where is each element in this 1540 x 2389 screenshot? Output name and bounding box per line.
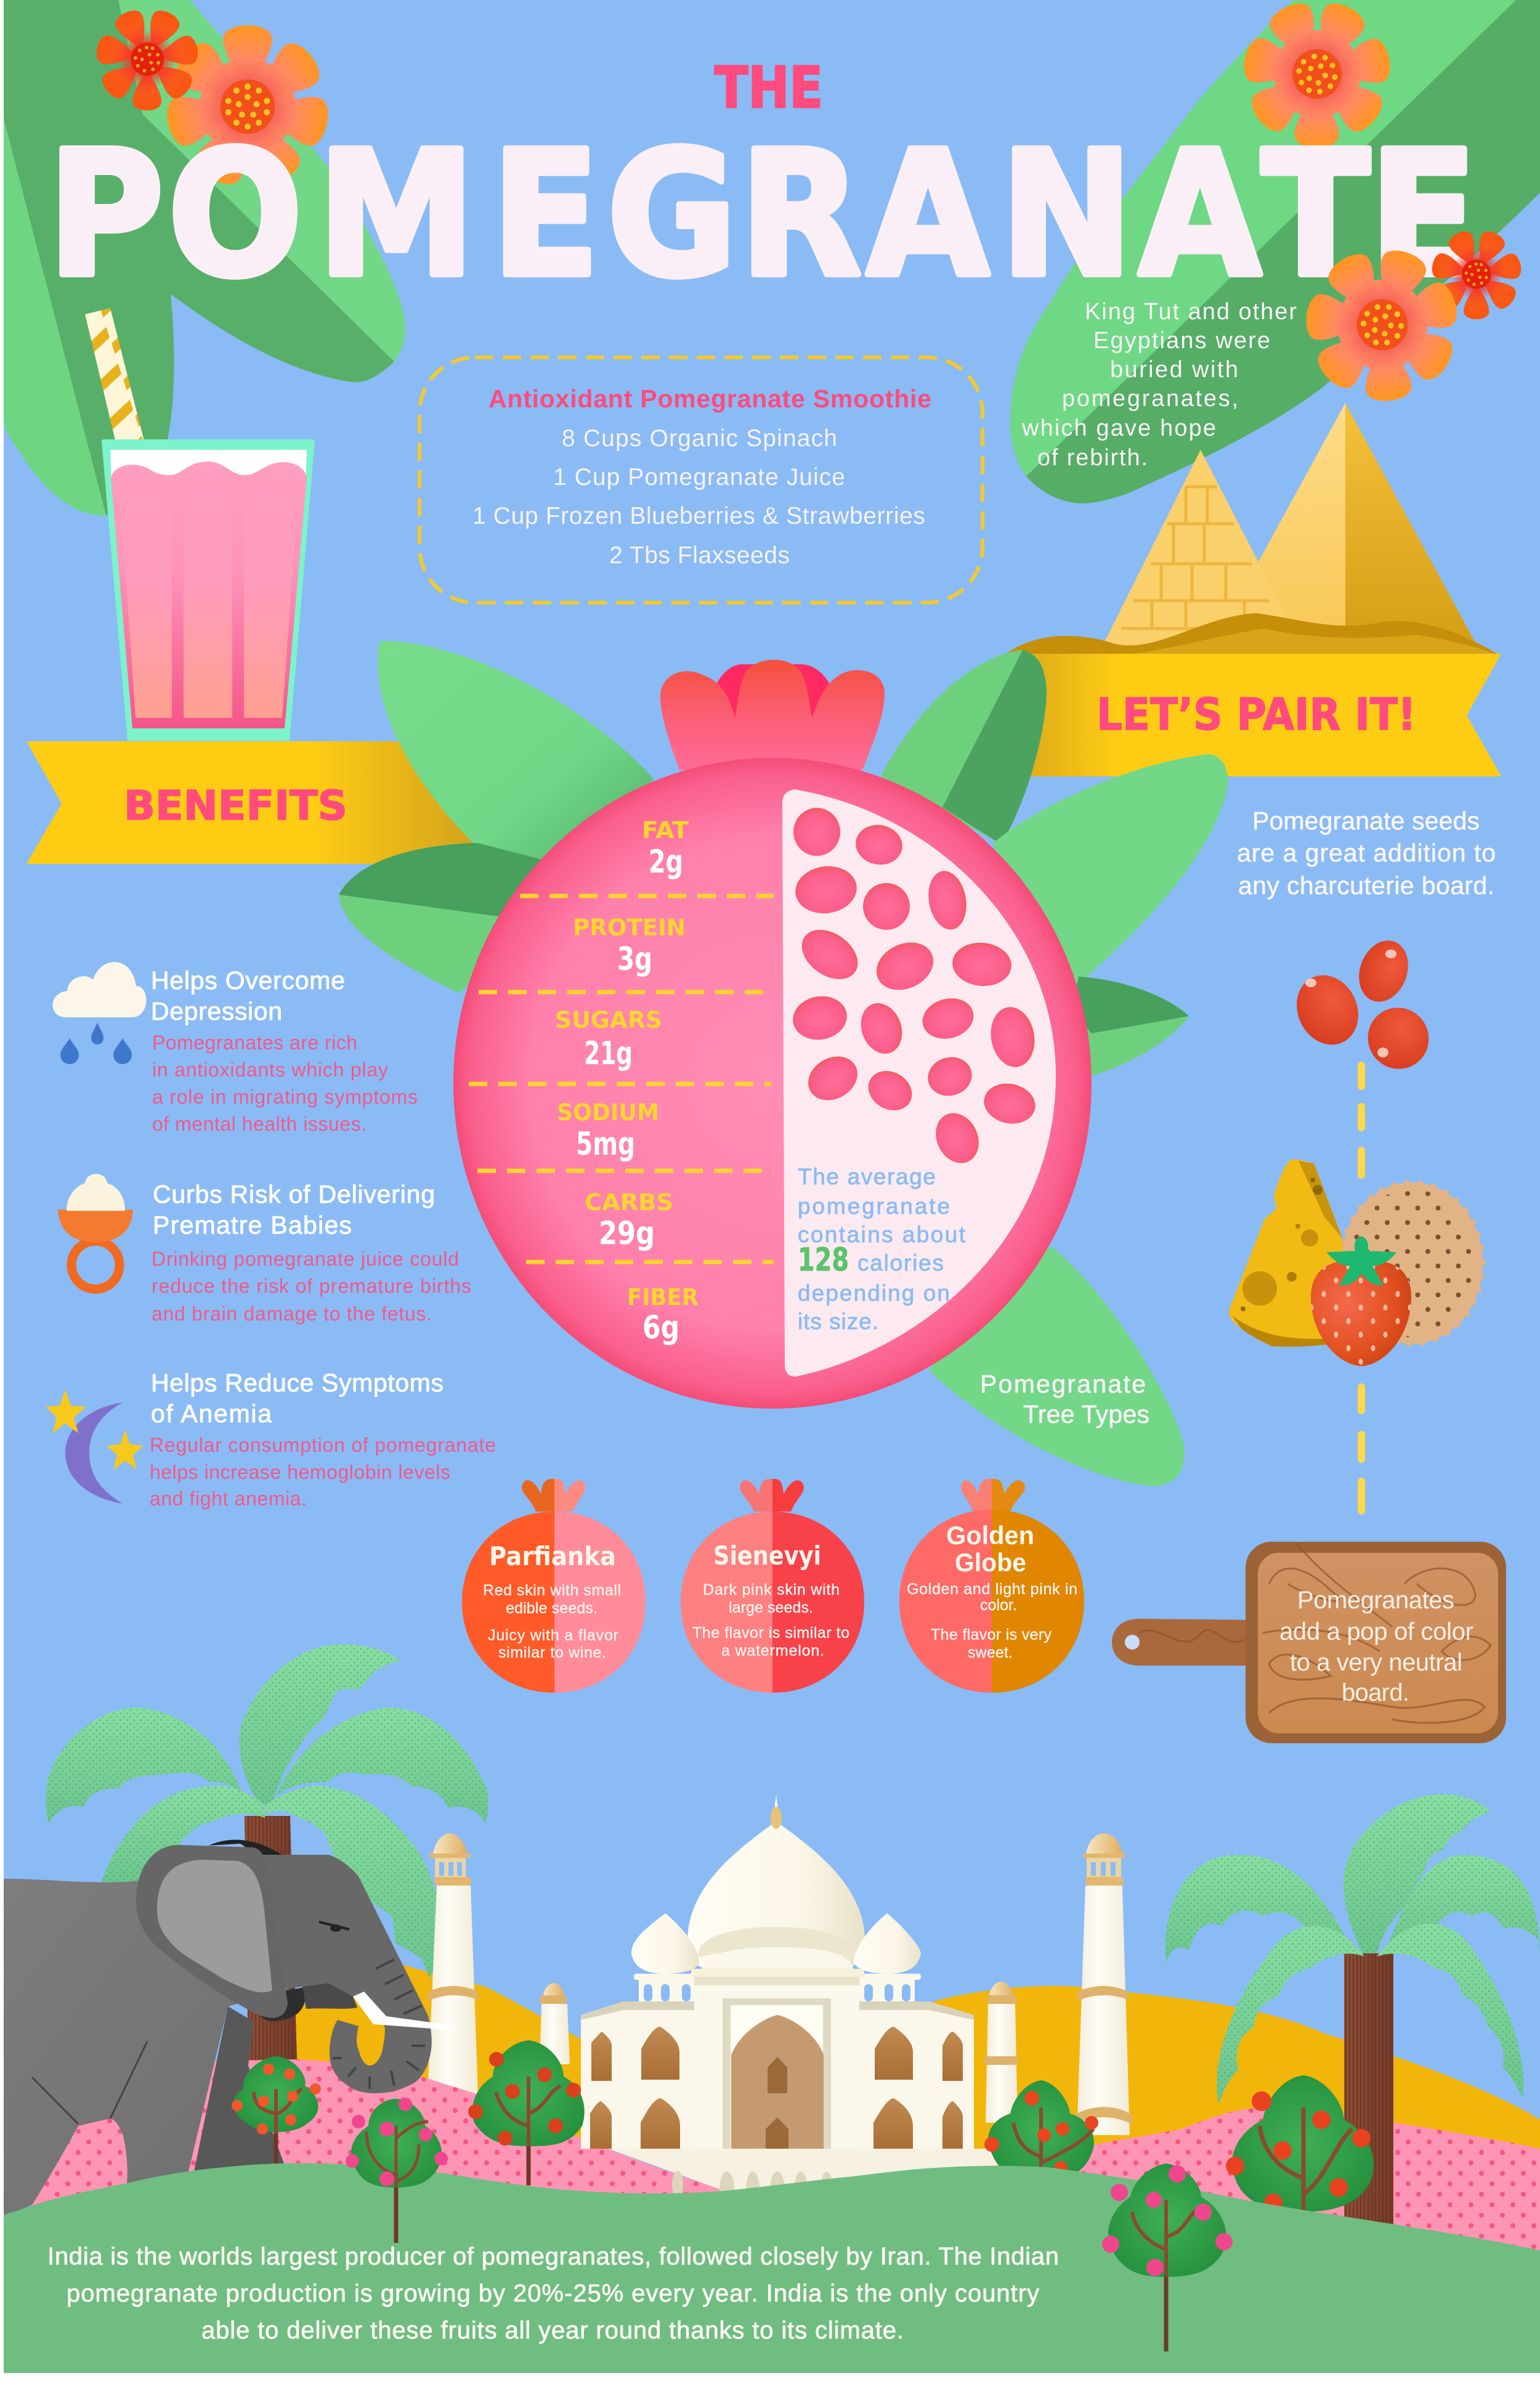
benefit 3: anemia — [46, 1369, 496, 1510]
text: tree types label — [980, 1370, 1149, 1428]
nutrient: fiber — [627, 1284, 699, 1346]
recipe ingredients: 8 Cups Organic Spinach — [562, 425, 837, 452]
description: Juicy with a flavor — [488, 1627, 618, 1644]
text: India note: India is the worlds largest producer of pomegranates, followed closely by Iran. The Indian — [47, 2243, 1059, 2270]
text: charcuterie note: any charcuterie board. — [1238, 871, 1494, 900]
nutrient: sugars — [555, 1007, 662, 1072]
benefit heading — [153, 1180, 435, 1239]
text: charcuterie note — [1237, 807, 1496, 900]
nutrient: fiber: FIBER — [627, 1284, 699, 1311]
board text: board. — [1342, 1679, 1409, 1706]
text: calories note — [798, 1164, 966, 1334]
nutrient: sodium — [557, 1099, 659, 1163]
leaf: top left pair — [4, 0, 405, 516]
pomegranate tree 5 — [1102, 2163, 1233, 2351]
icon: cutting board — [1112, 1542, 1506, 1743]
text: calories note: contains about — [798, 1222, 966, 1247]
recipe title: Antioxidant Pomegranate Smoothie — [488, 385, 931, 413]
minaret: right tall — [1074, 1833, 1132, 2135]
text: India note — [47, 2243, 1059, 2344]
name: Sienevyi — [713, 1540, 821, 1571]
icon: ring — [58, 1174, 133, 1289]
leaf: top right — [1010, 0, 1540, 503]
benefit text: helps increase hemoglobin levels — [150, 1461, 450, 1483]
pomegranate tree 1 — [232, 2056, 321, 2163]
side domes — [631, 1913, 699, 1974]
title: THE: THE — [715, 55, 823, 121]
flower: red right — [1414, 213, 1538, 336]
board text — [1279, 1587, 1473, 1706]
recipe ingredients — [472, 425, 925, 569]
icon: elephant — [4, 1840, 457, 2218]
name: Globe — [955, 1548, 1026, 1577]
main dome — [687, 1794, 865, 1969]
leaf: centre right — [992, 754, 1228, 986]
text: charcuterie note: are a great addition to — [1237, 839, 1496, 867]
leaf: centre right small — [1072, 977, 1189, 1076]
benefit heading: Helps Reduce Symptoms — [151, 1369, 444, 1397]
colonnades — [634, 1974, 921, 2003]
description: sweet. — [968, 1644, 1013, 1661]
nutrient: carbs: 29g — [599, 1215, 655, 1252]
banner heading: BENEFITS — [124, 782, 347, 829]
text: King Tut note: Egyptians were — [1093, 328, 1270, 354]
benefit 1: overcome depression — [53, 962, 418, 1135]
scene: green ground — [4, 2163, 1540, 2373]
benefit text — [150, 1434, 496, 1510]
text: India note: pomegranate production is growing by 20%-25% every year. India is the only country — [67, 2280, 1039, 2307]
central arch — [731, 2015, 824, 2149]
banner heading: LET’S PAIR IT! — [1096, 689, 1416, 740]
pomegranate tree 6 — [1226, 2075, 1374, 2301]
pomegranate tree 4 — [984, 2080, 1098, 2238]
benefit text: Regular consumption of pomegranate — [150, 1434, 496, 1456]
icon: smoothie glass — [85, 308, 315, 741]
benefit heading — [151, 1369, 444, 1428]
title: POMEGRANATE: POMEGRANATE — [47, 115, 1478, 315]
benefit heading: Helps Overcome — [151, 966, 345, 995]
board text: add a pop of color — [1279, 1618, 1473, 1645]
nutrient: sugars: SUGARS — [555, 1007, 662, 1033]
board text: to a very neutral — [1290, 1649, 1462, 1676]
cheese — [1229, 1160, 1346, 1347]
text: calories note: depending on — [798, 1280, 950, 1306]
tree type: Sienevyi — [681, 1479, 864, 1693]
scene: pink hills — [25, 2059, 1540, 2280]
benefit text: reduce the risk of premature births — [152, 1275, 471, 1297]
palm tree: left — [46, 1644, 488, 2061]
nutrient: sodium: SODIUM — [557, 1099, 659, 1126]
text: King Tut note: which gave hope — [1021, 415, 1216, 441]
text: India note: able to deliver these fruits all year round thanks to its climate. — [201, 2317, 904, 2344]
text: King Tut note: of rebirth. — [1037, 445, 1148, 471]
icon: pyramids — [1002, 403, 1501, 656]
description: edible seeds. — [506, 1600, 598, 1617]
cracker — [1341, 1182, 1483, 1344]
board text: Pomegranates — [1297, 1587, 1454, 1614]
text: tree types label: Tree Types — [1023, 1400, 1149, 1428]
side arches — [590, 2027, 963, 2149]
description: similar to wine. — [498, 1644, 606, 1661]
pomegranate tree 2 — [346, 2098, 448, 2243]
benefit heading: Prematre Babies — [153, 1211, 352, 1239]
inner flesh — [782, 789, 1056, 1377]
benefit text: Pomegranates are rich — [152, 1032, 357, 1054]
text: calories note: 128 — [798, 1242, 849, 1279]
nutrient: sugars: 21g — [584, 1035, 633, 1072]
text: calories note: its size. — [798, 1309, 878, 1334]
recipe ingredients: 1 Cup Frozen Blueberries & Strawberries — [472, 503, 925, 529]
description: The flavor is similar to — [692, 1624, 849, 1642]
benefit heading: Curbs Risk of Delivering — [153, 1180, 435, 1208]
dashed connector — [1358, 1065, 1365, 1511]
description — [692, 1581, 849, 1659]
text: calories note: pomegranate — [798, 1194, 950, 1219]
name: Golden — [946, 1521, 1034, 1550]
minaret: right small — [984, 1982, 1018, 2123]
building body — [581, 2001, 974, 2149]
leaf: centre upper left — [378, 641, 654, 881]
description: Golden and light pink in — [907, 1581, 1077, 1598]
scene: golden hills — [290, 1962, 1540, 2249]
icon: moon and stars — [46, 1390, 144, 1504]
benefit heading: Depression — [151, 997, 282, 1025]
icon: rain cloud — [53, 962, 146, 1064]
minaret: left small — [540, 1983, 570, 2064]
leaf: centre lower left — [339, 843, 554, 993]
tree type: Parfianka — [462, 1479, 646, 1693]
name: Parfianka — [489, 1541, 616, 1571]
text: calories note: The average — [798, 1164, 936, 1189]
flower: orange top right — [1215, 0, 1419, 176]
nutrient: protein — [573, 914, 686, 978]
flower: orange top left — [163, 25, 332, 190]
benefit text — [152, 1248, 471, 1325]
benefit heading: of Anemia — [151, 1399, 272, 1428]
leaf: tree types — [928, 1246, 1185, 1486]
crown — [660, 660, 885, 770]
icon: three seeds — [1286, 934, 1441, 1081]
Taj Mahal — [581, 1794, 1010, 2206]
text: King Tut note: buried with — [1110, 357, 1238, 383]
nutrient: fat: FAT — [642, 817, 689, 844]
pomegranate: main fruit — [453, 660, 1092, 1409]
text: charcuterie note: Pomegranate seeds — [1252, 807, 1480, 835]
nutrient: fat: 2g — [649, 844, 683, 881]
nutrient: carbs: CARBS — [585, 1189, 673, 1216]
nutrient: protein: 3g — [617, 941, 652, 978]
description: Red skin with small — [483, 1582, 621, 1599]
text: calories note: calories — [857, 1250, 944, 1276]
flower: orange right — [1281, 226, 1483, 426]
pomegranate tree 3 — [468, 2040, 585, 2185]
description — [483, 1582, 621, 1661]
text: tree types label: Pomegranate — [980, 1370, 1146, 1398]
text: King Tut note — [1021, 299, 1297, 471]
text: King Tut note: King Tut and other — [1085, 299, 1297, 325]
description: The flavor is very — [931, 1626, 1052, 1643]
benefit text: a role in migrating symptoms — [152, 1086, 418, 1108]
recipe ingredients: 2 Tbs Flaxseeds — [609, 542, 790, 569]
benefit text: Drinking pomegranate juice could — [152, 1248, 459, 1270]
palm tree: right — [1165, 1794, 1540, 2231]
text: King Tut note: pomegranates, — [1062, 386, 1238, 412]
benefit text: of mental health issues. — [152, 1113, 367, 1135]
nutrient: protein: PROTEIN — [573, 914, 686, 941]
minaret: left tall — [427, 1833, 478, 2095]
banner: let's pair it — [1010, 654, 1501, 776]
banner: benefits — [26, 741, 487, 864]
dashed nutrient dividers — [469, 896, 774, 1262]
recipe box — [419, 357, 983, 603]
description: Dark pink skin with — [703, 1581, 840, 1598]
tree type: Golden Globe — [899, 1479, 1084, 1693]
benefit text — [152, 1032, 418, 1135]
description: color. — [980, 1597, 1017, 1614]
leaf: centre upper right — [881, 650, 1047, 844]
terrace — [608, 2149, 1010, 2194]
name — [946, 1521, 1034, 1577]
description: a watermelon. — [721, 1642, 824, 1659]
benefit text: and fight anemia. — [150, 1488, 307, 1510]
seeds — [790, 808, 1039, 1170]
recipe ingredients: 1 Cup Pomegranate Juice — [553, 464, 845, 490]
benefit text: and brain damage to the fetus. — [152, 1303, 432, 1325]
benefit text: in antioxidants which play — [152, 1059, 388, 1081]
nutrient: fiber: 6g — [642, 1309, 679, 1346]
flower: red top left — [76, 0, 217, 129]
benefit 2: premature babies — [58, 1174, 471, 1325]
icon: cheese, cracker, strawberry — [1229, 1160, 1483, 1366]
benefit heading — [151, 966, 345, 1025]
description: large seeds. — [729, 1599, 813, 1616]
strawberry — [1311, 1236, 1411, 1366]
nutrient: fat — [642, 817, 689, 881]
description — [907, 1581, 1077, 1661]
nutrient: sodium: 5mg — [576, 1126, 635, 1163]
nutrient: carbs — [585, 1189, 673, 1252]
